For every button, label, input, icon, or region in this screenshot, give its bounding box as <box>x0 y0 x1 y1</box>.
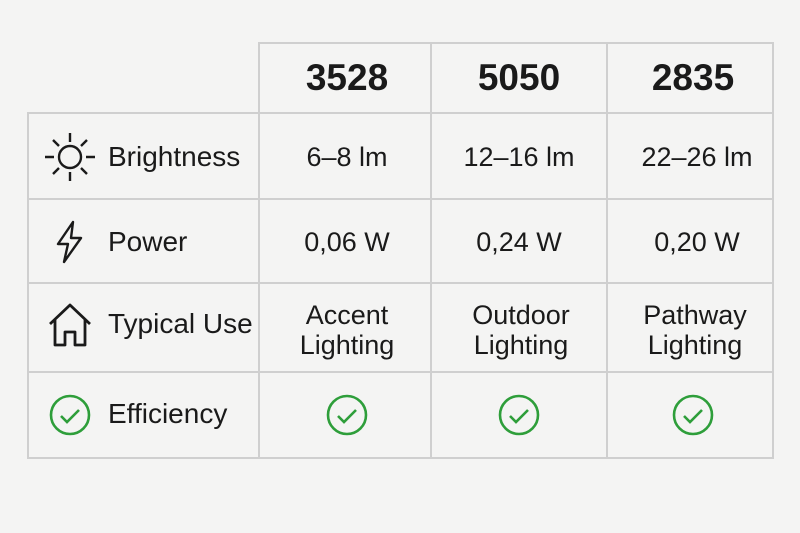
icon: sun <box>45 133 95 181</box>
power values: 0,20 W <box>654 227 740 257</box>
use values: Lighting <box>474 330 568 360</box>
power values <box>304 227 740 257</box>
use values <box>300 300 747 360</box>
brightness values: 22–26 lm <box>641 142 753 172</box>
power values: 0,06 W <box>304 227 390 257</box>
use values: Lighting <box>648 330 742 360</box>
label: Power: Power <box>108 226 187 257</box>
use values: Pathway <box>643 300 747 330</box>
brightness values: 12–16 lm <box>463 142 575 172</box>
use values: Lighting <box>300 330 394 360</box>
use values: Accent <box>306 300 388 330</box>
label: Typical Use: Typical Use <box>108 308 253 339</box>
label: Efficiency: Efficiency <box>108 398 227 429</box>
header: 2835: 2835 <box>652 57 734 98</box>
efficiency checks <box>326 394 714 436</box>
power values: 0,24 W <box>476 227 562 257</box>
brightness values: 6–8 lm <box>306 142 388 172</box>
header: 3528: 3528 <box>306 57 388 98</box>
icon: house <box>49 304 91 346</box>
label: Brightness: Brightness <box>108 141 240 172</box>
icon: check <box>50 394 90 436</box>
icon: bolt <box>56 220 82 264</box>
use values: Outdoor <box>472 300 570 330</box>
header: 5050: 5050 <box>478 57 560 98</box>
brightness values <box>306 142 753 172</box>
